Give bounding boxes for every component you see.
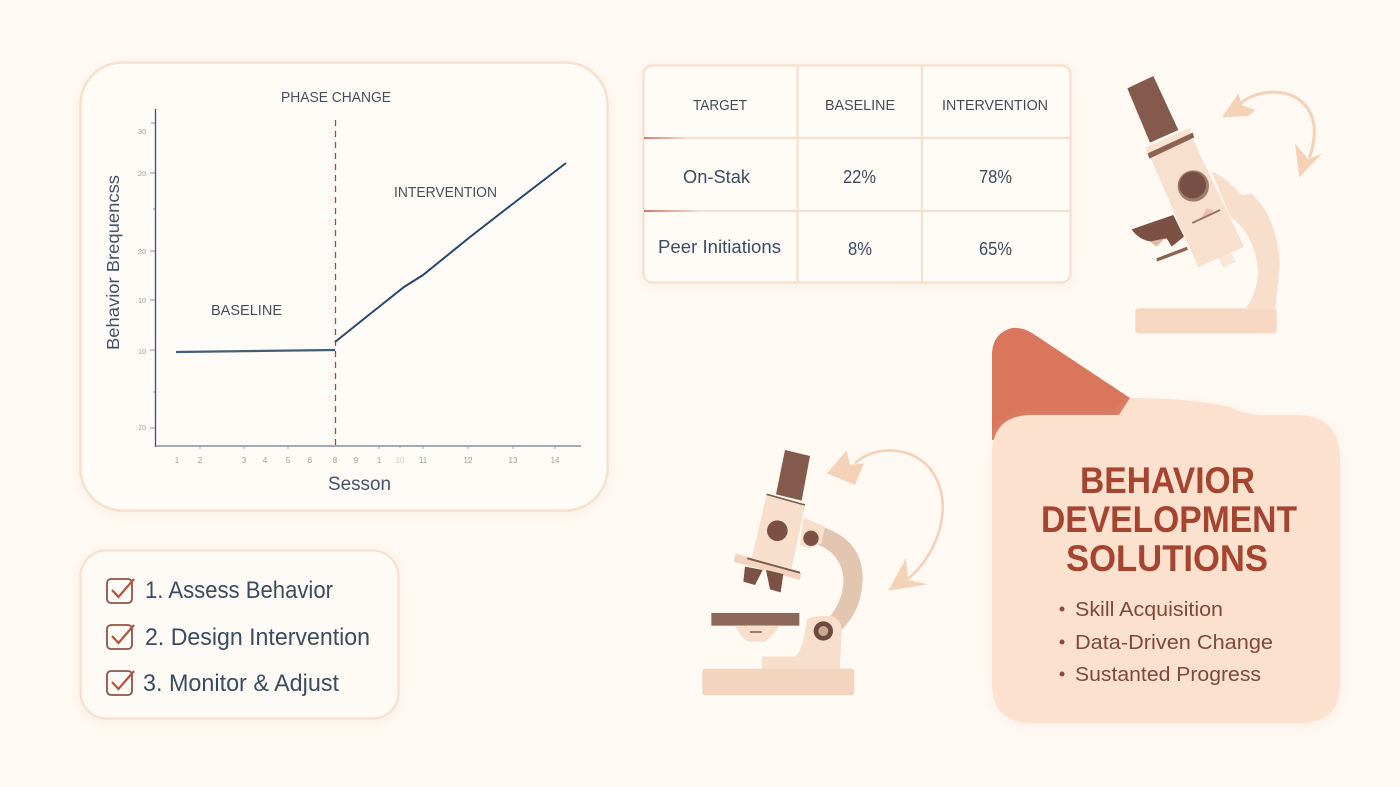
x axis with ticks: 10 bbox=[396, 456, 405, 465]
x axis with ticks: 14 bbox=[551, 456, 560, 465]
x axis with ticks: 2 bbox=[198, 456, 203, 465]
card bullet list: Sustanted Progress bbox=[1075, 663, 1261, 686]
arrow: curved top right bbox=[1222, 92, 1322, 177]
card title: SOLUTIONS bbox=[1066, 538, 1268, 579]
arrow: curved bottom centre bbox=[827, 450, 943, 591]
y axis with ticks: 10 bbox=[138, 423, 146, 432]
x axis with ticks: 4 bbox=[263, 456, 268, 465]
y axis title: Behavior Brequencss bbox=[103, 175, 123, 350]
table row: on-task: 22% bbox=[843, 167, 876, 187]
x axis with ticks: 11 bbox=[419, 456, 428, 465]
table row: on-task bbox=[683, 167, 1012, 187]
panel: checklist bbox=[80, 550, 398, 718]
table row: peer initiations: 8% bbox=[848, 239, 872, 259]
x axis with ticks: 13 bbox=[509, 456, 518, 465]
y axis with ticks: 20 bbox=[138, 247, 146, 256]
checklist item 3: 3. Monitor & Adjust bbox=[143, 670, 339, 697]
checklist item 1: 1. Assess Behavior bbox=[145, 577, 333, 604]
card bullet list bbox=[1060, 598, 1273, 686]
card bullet list: Data-Driven Change bbox=[1075, 631, 1273, 654]
table row: on-task: 78% bbox=[979, 167, 1012, 187]
checklist item 2: 2. Design Intervention bbox=[145, 624, 370, 651]
label: intervention: INTERVENTION bbox=[394, 185, 497, 201]
label: baseline: BASELINE bbox=[211, 303, 282, 319]
data line: baseline phase bbox=[176, 350, 335, 352]
x axis with ticks: 1 bbox=[377, 456, 382, 465]
x axis with ticks: 1 bbox=[175, 456, 180, 465]
y axis with ticks: 20 bbox=[138, 169, 146, 178]
card red tab bbox=[992, 328, 1130, 440]
x axis with ticks: 6 bbox=[308, 456, 313, 465]
table header row: TARGET bbox=[693, 98, 747, 114]
y axis with ticks: 10 bbox=[138, 347, 146, 356]
x axis with ticks: 3 bbox=[242, 456, 247, 465]
table header row: BASELINE bbox=[825, 98, 895, 114]
icon: microscope top right with arrow bbox=[1127, 76, 1322, 333]
card title: DEVELOPMENT bbox=[1041, 499, 1297, 540]
x axis with ticks: 8 bbox=[333, 456, 338, 465]
x axis title: Sesson bbox=[328, 474, 391, 495]
table row: peer initiations: 65% bbox=[979, 239, 1012, 259]
card bullet list: Skill Acquisition bbox=[1075, 598, 1223, 621]
card body bbox=[992, 398, 1340, 723]
table row: peer initiations bbox=[658, 237, 1012, 259]
chart heading: phase change: PHASE CHANGE bbox=[281, 90, 391, 106]
y axis with ticks: 10 bbox=[138, 296, 146, 305]
phase change dashed line bbox=[334, 120, 336, 450]
y axis with ticks bbox=[138, 109, 156, 447]
table header row: INTERVENTION bbox=[942, 98, 1048, 114]
card title bbox=[1041, 460, 1297, 579]
x axis with ticks: 9 bbox=[354, 456, 359, 465]
panel: line chart bbox=[80, 62, 608, 510]
panel: behavior development solutions card bbox=[992, 328, 1340, 723]
card title: BEHAVIOR bbox=[1080, 460, 1255, 501]
table row: peer initiations: Peer Initiations bbox=[658, 237, 781, 257]
x axis with ticks: 5 bbox=[286, 456, 291, 465]
data line: intervention phase bbox=[335, 163, 566, 342]
y axis with ticks: 30 bbox=[138, 127, 146, 136]
table header row bbox=[693, 98, 1048, 114]
x axis with ticks: 12 bbox=[464, 456, 473, 465]
panel: results table bbox=[644, 66, 1070, 282]
table row: on-task: On-Stak bbox=[683, 167, 751, 187]
x axis with ticks bbox=[155, 446, 581, 465]
icon: microscope bottom centre with arrow bbox=[702, 450, 943, 695]
